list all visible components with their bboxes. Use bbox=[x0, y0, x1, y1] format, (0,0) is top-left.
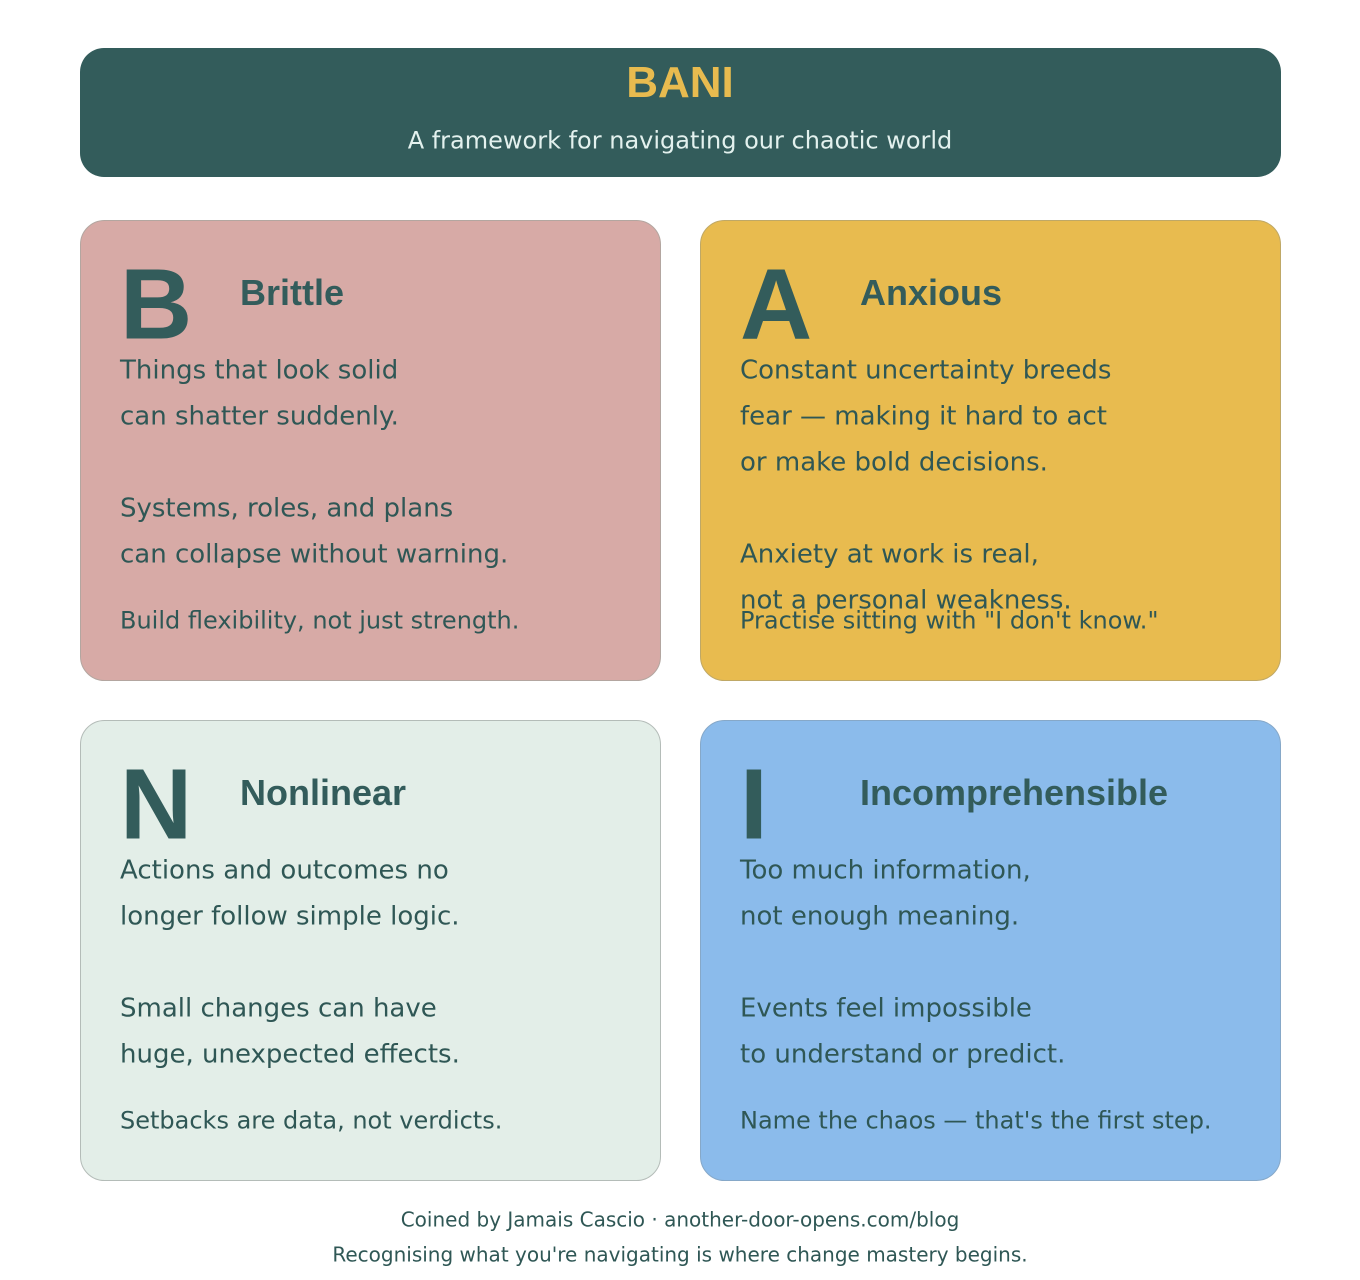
tagline: Incomprehensible: Name the chaos — that's the first step. bbox=[740, 1106, 1212, 1134]
body text: Anxious: Anxiety at work is real, bbox=[740, 540, 1039, 570]
body text: Nonlinear bbox=[120, 856, 460, 1070]
heading: Incomprehensible: Incomprehensible bbox=[860, 772, 1168, 813]
letter N: N bbox=[120, 748, 192, 860]
letter B: B bbox=[120, 248, 192, 360]
tagline: Anxious: Practise sitting with "I don't know." bbox=[740, 606, 1158, 634]
footer: Recognising what you're navigating is where change mastery begins. bbox=[332, 1242, 1028, 1266]
body text: Incomprehensible: Too much information, bbox=[739, 856, 1031, 886]
body text: Anxious: or make bold decisions. bbox=[740, 448, 1048, 478]
body text: Anxious: fear — making it hard to act bbox=[740, 402, 1107, 432]
body text: Nonlinear: Actions and outcomes no bbox=[120, 856, 449, 886]
body text: Nonlinear: huge, unexpected effects. bbox=[120, 1040, 460, 1070]
tagline: Nonlinear: Setbacks are data, not verdicts. bbox=[120, 1106, 502, 1134]
heading: Nonlinear: Nonlinear bbox=[240, 772, 406, 813]
title: BANI bbox=[626, 58, 734, 107]
footer bbox=[332, 1208, 1028, 1266]
body text: Nonlinear: Small changes can have bbox=[120, 994, 437, 1024]
subtitle: A framework for navigating our chaotic world bbox=[408, 126, 952, 154]
body text: Anxious: Constant uncertainty breeds bbox=[740, 356, 1111, 386]
footer: Coined by Jamais Cascio · another-door-opens.com/blog bbox=[401, 1208, 959, 1232]
heading: Anxious: Anxious bbox=[860, 272, 1002, 313]
body text: Anxious: not a personal weakness. bbox=[740, 586, 1072, 616]
heading: Brittle: Brittle bbox=[240, 272, 344, 313]
panel: Brittle bbox=[80, 220, 660, 680]
body text: Incomprehensible: not enough meaning. bbox=[740, 902, 1019, 932]
title banner bbox=[80, 48, 1281, 177]
body text: Brittle: Systems, roles, and plans bbox=[120, 494, 453, 524]
body text: Incomprehensible bbox=[739, 856, 1065, 1070]
body text: Incomprehensible: to understand or predict. bbox=[740, 1040, 1065, 1070]
panel: Nonlinear bbox=[80, 720, 660, 1180]
body text: Incomprehensible: Events feel impossible bbox=[740, 994, 1032, 1024]
panel: Incomprehensible bbox=[700, 720, 1280, 1180]
tagline: Brittle: Build flexibility, not just strength. bbox=[120, 606, 519, 634]
body text: Brittle: Things that look solid bbox=[119, 356, 398, 386]
letter I: I bbox=[740, 748, 768, 860]
letter A: A bbox=[740, 248, 812, 360]
body text: Brittle: can shatter suddenly. bbox=[120, 402, 399, 432]
body text: Brittle bbox=[119, 356, 508, 570]
body text: Nonlinear: longer follow simple logic. bbox=[120, 902, 460, 932]
body text: Anxious bbox=[740, 356, 1111, 616]
panel: Anxious bbox=[700, 220, 1280, 680]
body text: Brittle: can collapse without warning. bbox=[120, 540, 508, 570]
